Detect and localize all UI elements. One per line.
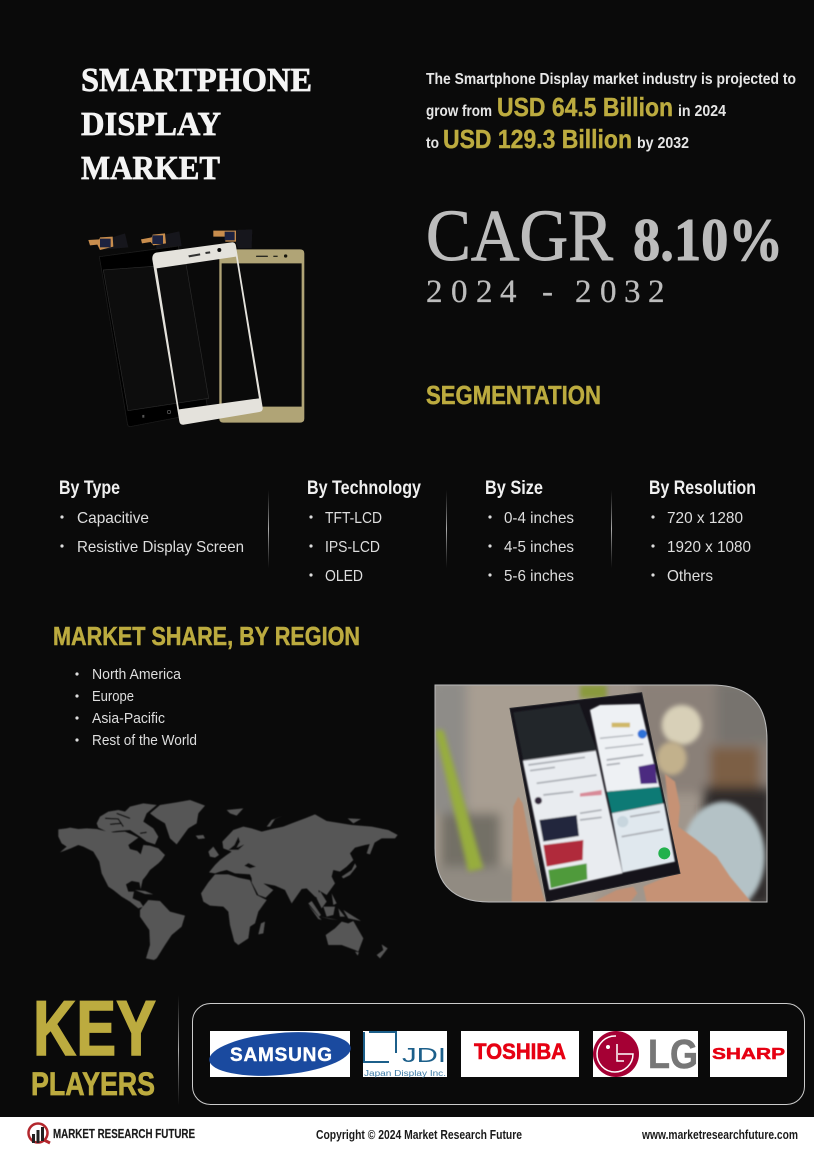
segment: by size: 5-6 inches <box>504 568 574 585</box>
logo: japan display <box>363 1031 447 1078</box>
title <box>81 62 312 187</box>
phone screen content <box>513 703 675 890</box>
title: DISPLAY <box>81 106 221 143</box>
segment: by type: Capacitive <box>77 510 149 527</box>
segment: by size: 0-4 inches <box>504 510 574 527</box>
segment: by size <box>485 478 574 585</box>
segment: by resolution: By Resolution <box>649 478 756 499</box>
CAGR figure: CAGR <box>426 195 613 276</box>
segment: by type: Resistive Display Screen <box>77 539 244 556</box>
segment: by technology: TFT-LCD <box>325 510 382 527</box>
segment: by technology: OLED <box>325 568 363 585</box>
segment: by technology: IPS-LCD <box>325 539 380 556</box>
heading: key players: KEY <box>33 984 156 1072</box>
market projection text: USD 129.3 Billion <box>443 124 632 154</box>
black panel <box>99 246 209 427</box>
logo: japan display: Japan Display Inc. <box>364 1069 446 1078</box>
world map <box>58 800 398 960</box>
CAGR figure: 8.10% <box>633 207 783 273</box>
segment: by type: By Type <box>59 478 120 499</box>
logo: sharp <box>710 1031 787 1077</box>
CAGR figure <box>426 195 783 310</box>
region list: Europe <box>92 688 134 705</box>
segment: by size: 4-5 inches <box>504 539 574 556</box>
segment: by resolution <box>649 478 756 585</box>
right hand behind the phone <box>643 774 752 903</box>
logo: samsung <box>207 1027 353 1081</box>
americas <box>58 800 205 960</box>
panel: key player logos <box>192 1004 804 1104</box>
blurred background <box>436 686 766 902</box>
logo: lg <box>593 1031 698 1077</box>
heading: key players: PLAYERS <box>31 1066 155 1102</box>
segment: by resolution: Others <box>667 568 713 585</box>
title: MARKET <box>81 150 220 187</box>
market projection text: USD 64.5 Billion <box>497 92 673 122</box>
heading: segmentation: SEGMENTATION <box>426 380 601 410</box>
logo: japan display: JDI <box>402 1045 446 1067</box>
logo: toshiba: TOSHIBA <box>474 1039 566 1064</box>
market projection text: in 2024 <box>678 103 726 120</box>
market projection text <box>426 71 796 154</box>
white panel <box>152 242 263 425</box>
CAGR figure: 2024 - 2032 <box>426 274 664 310</box>
icon: market research future logo <box>28 1124 50 1143</box>
brand name: MARKET RESEARCH FUTURE <box>53 1126 195 1141</box>
flex connectors <box>88 229 252 250</box>
market projection text: grow from <box>426 103 492 120</box>
europe asia africa oceania <box>201 808 398 958</box>
gold panel <box>219 249 304 423</box>
logo: toshiba <box>461 1031 579 1077</box>
title: SMARTPHONE <box>81 62 312 99</box>
phone body <box>510 693 680 902</box>
left hand behind the phone <box>512 797 545 903</box>
heading: key players <box>31 984 156 1102</box>
logo: samsung: SAMSUNG <box>230 1045 332 1066</box>
market projection text: to <box>426 135 439 152</box>
footer <box>0 1117 814 1150</box>
segment: by resolution: 720 x 1280 <box>667 510 743 527</box>
segment: by type <box>59 478 244 556</box>
region list <box>75 666 197 749</box>
region list: North America <box>92 666 182 683</box>
left thumb over phone <box>592 887 637 903</box>
market projection text: by 2032 <box>637 135 689 152</box>
logo: lg: LG <box>648 1031 698 1077</box>
segment: by technology: By Technology <box>307 478 421 499</box>
copyright: Copyright © 2024 Market Research Future <box>316 1127 522 1142</box>
logo: sharp: SHARP <box>712 1046 785 1063</box>
segment: by size: By Size <box>485 478 543 499</box>
region list: Asia-Pacific <box>92 710 165 727</box>
icon: three touch screen panels <box>88 229 304 427</box>
photo: foldable smartphone in hands <box>436 686 766 902</box>
heading: market share by region: MARKET SHARE, BY REGION <box>53 621 360 651</box>
region list: Rest of the World <box>92 732 197 749</box>
segment: by resolution: 1920 x 1080 <box>667 539 751 556</box>
segment: by technology <box>307 478 421 585</box>
